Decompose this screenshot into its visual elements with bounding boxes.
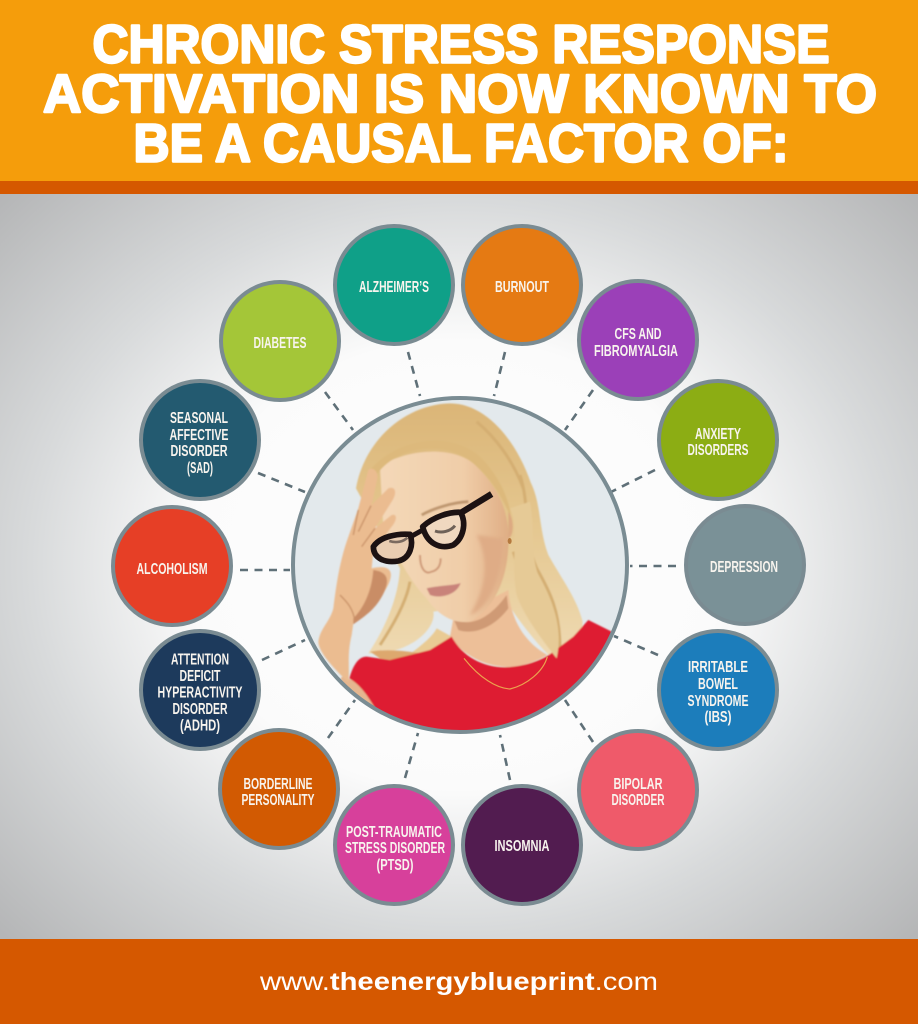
title: BE A CAUSAL FACTOR OF:: [134, 114, 788, 174]
circle: Alcoholism: [113, 507, 231, 625]
circle: CFS and Fibromyalgia: FIBROMYALGIA: [594, 343, 678, 360]
necklace: [464, 657, 547, 689]
circle: SAD: (SAD): [187, 460, 213, 477]
hairline: [378, 460, 510, 513]
circle: Irritable Bowel Syndrome: [659, 631, 777, 749]
circle: Irritable Bowel Syndrome: (IBS): [704, 709, 732, 726]
circle: Depression: DEPRESSION: [710, 559, 778, 576]
hair strands: [380, 422, 560, 648]
circle: Anxiety Disorders: ANXIETY: [695, 426, 741, 443]
circle: Insomnia: [463, 786, 581, 904]
circle: Borderline Personality: PERSONALITY: [242, 792, 315, 809]
website url: www. theenergyblueprint .com: [259, 968, 658, 996]
circle: SAD: SEASONAL: [170, 410, 228, 427]
circle: CFS and Fibromyalgia: CFS AND: [614, 326, 662, 343]
circle: PTSD: STRESS DISORDER: [345, 840, 445, 857]
title: [43, 16, 877, 174]
circle: Burnout: BURNOUT: [495, 279, 549, 296]
circle: Anxiety Disorders: DISORDERS: [688, 442, 748, 459]
central portrait photo: [293, 398, 627, 735]
earring: [508, 538, 512, 544]
title: CHRONIC STRESS RESPONSE: [92, 16, 830, 74]
circle: Irritable Bowel Syndrome: SYNDROME: [688, 693, 748, 710]
circle: SAD: AFFECTIVE: [170, 427, 228, 444]
wavy hair over bg (right): [510, 502, 559, 658]
circle: Irritable Bowel Syndrome: IRRITABLE: [688, 659, 748, 676]
header banner: [0, 0, 918, 194]
circle: Irritable Bowel Syndrome: BOWEL: [698, 676, 738, 693]
hair mass: [356, 403, 583, 664]
circle: Alcoholism: ALCOHOLISM: [136, 561, 208, 578]
circle: Bipolar Disorder: [579, 731, 697, 849]
face: [380, 452, 509, 622]
circle: Diabetes: DIABETES: [254, 335, 306, 352]
glasses: [373, 494, 492, 562]
brow, nose, mouth, chin: [422, 502, 468, 515]
title: ACTIVATION IS NOW KNOWN TO: [43, 65, 877, 124]
circle: ADHD: (ADHD): [180, 718, 220, 734]
circle: Borderline Personality: [220, 730, 338, 848]
circle: ADHD: HYPERACTIVITY: [158, 684, 243, 702]
circle: Anxiety Disorders: [659, 381, 777, 499]
circle: ADHD: [141, 631, 259, 749]
shirt: [349, 620, 613, 735]
neck: [450, 590, 547, 667]
circle: ADHD: DISORDER: [172, 701, 228, 718]
circle: PTSD: [335, 786, 453, 904]
circle: Insomnia: INSOMNIA: [494, 838, 550, 855]
upper arm: [341, 677, 393, 717]
circle: Burnout: [463, 226, 581, 344]
circle: ADHD: DEFICIT: [180, 668, 221, 685]
circle: SAD: [141, 381, 259, 499]
circle: Alzheimer's: ALZHEIMER’S: [359, 279, 429, 296]
circle: SAD: DISORDER: [170, 443, 228, 460]
circle: ADHD: ATTENTION: [171, 652, 229, 668]
circle: PTSD: POST-TRAUMATIC: [346, 824, 442, 841]
circle: Bipolar Disorder: DISORDER: [612, 792, 664, 809]
circle: Depression: [686, 506, 804, 624]
footer banner: [0, 939, 918, 1024]
hand: [318, 469, 396, 682]
circle: Alzheimer's: [335, 226, 453, 344]
circle: Diabetes: [221, 282, 339, 400]
background panel: [0, 194, 918, 940]
circle: PTSD: (PTSD): [376, 857, 414, 874]
circle: Bipolar Disorder: BIPOLAR: [614, 776, 662, 793]
circle: Borderline Personality: BORDERLINE: [244, 776, 312, 793]
circle: CFS and Fibromyalgia: [579, 281, 697, 399]
dashed connectors: [240, 352, 676, 780]
